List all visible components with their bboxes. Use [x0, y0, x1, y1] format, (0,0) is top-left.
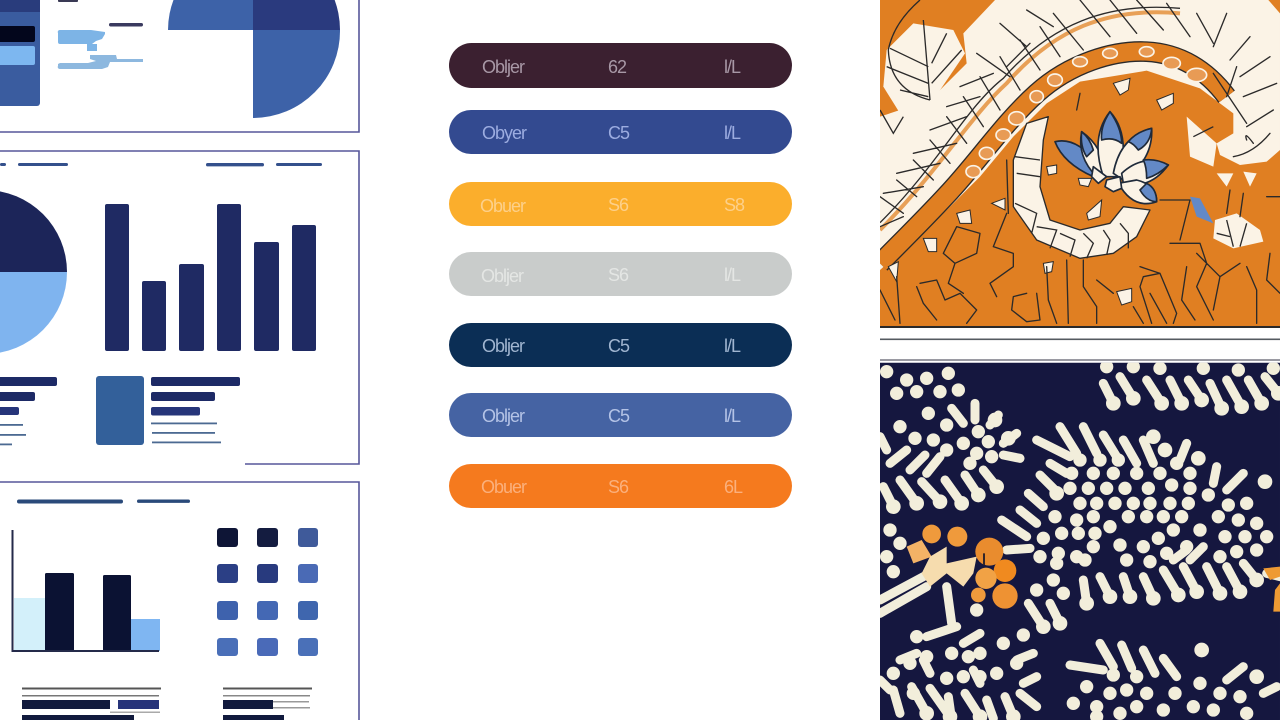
pill row 7: [449, 464, 792, 508]
heading lines: [0, 163, 322, 166]
orange strip with ovals: [880, 7, 1227, 263]
column chart: [12, 530, 160, 651]
pill row 7: Obuer: [481, 477, 527, 497]
panel: top dashboard fragment: [0, 0, 359, 132]
pill row 1: l/L: [724, 57, 741, 77]
legend smudges: [58, 0, 143, 69]
pill row 5: Obljer: [482, 336, 525, 356]
pill row 4: Obljer: [481, 266, 524, 286]
feather veins: [880, 0, 1277, 227]
panel: bottom dashboard: [0, 482, 359, 720]
drop stems: [880, 377, 1280, 720]
right floral cluster: [1187, 117, 1263, 248]
bar chart: [105, 204, 316, 351]
paisley feather band: [880, 0, 1280, 270]
square grid: [217, 528, 318, 656]
pill row 2: C5: [608, 123, 630, 143]
pill row 3: S6: [608, 195, 629, 215]
pill row 1: Obljer: [482, 57, 525, 77]
pill row 5: l/L: [724, 336, 741, 356]
ovals along band: [966, 47, 1207, 178]
pill row 1: 62: [608, 57, 627, 77]
pill row 3: [449, 182, 792, 226]
pill row 4: [449, 252, 792, 296]
top-left leaf: [880, 0, 965, 133]
drop heads: [893, 393, 1278, 717]
pill row 2: Obyer: [482, 123, 527, 143]
heading lines: [17, 500, 190, 504]
pill row 3: Obuer: [480, 196, 526, 216]
pill row 6: l/L: [724, 406, 741, 426]
lotus flower: [1055, 112, 1168, 204]
pill row 2: l/L: [724, 123, 741, 143]
panel: middle dashboard: [0, 151, 359, 464]
pill row 1: [449, 43, 792, 88]
pill row 2: [449, 110, 792, 154]
crescent: [1013, 117, 1150, 258]
pill row 6: Obljer: [482, 406, 525, 426]
pill row 6: [449, 393, 792, 437]
orange flower: [907, 525, 1280, 612]
right table: [223, 688, 312, 720]
pill row 6: C5: [608, 406, 630, 426]
bottom border: [880, 326, 1280, 328]
pill row 7: 6L: [724, 477, 743, 497]
left legend: [0, 377, 57, 445]
pill row 5: C5: [608, 336, 630, 356]
half pie chart: [0, 190, 67, 354]
pill row 5: [449, 323, 792, 367]
pill row 4: l/L: [724, 265, 741, 285]
pie chart: [168, 0, 340, 118]
panel: orange batik pattern: [880, 0, 1280, 328]
card with bars: [0, 0, 40, 106]
small buds: [888, 78, 1173, 305]
panel: navy batik pattern: [880, 363, 1280, 720]
right legend: [151, 377, 240, 443]
crack lines: [880, 93, 1280, 323]
dot fields: [887, 367, 1273, 717]
pill row 3: S8: [724, 195, 745, 215]
band between pattern panels: [880, 328, 1280, 362]
blue card: [96, 376, 144, 445]
pill row 4: S6: [608, 265, 629, 285]
pill row 7: S6: [608, 477, 629, 497]
left table: [22, 688, 161, 720]
